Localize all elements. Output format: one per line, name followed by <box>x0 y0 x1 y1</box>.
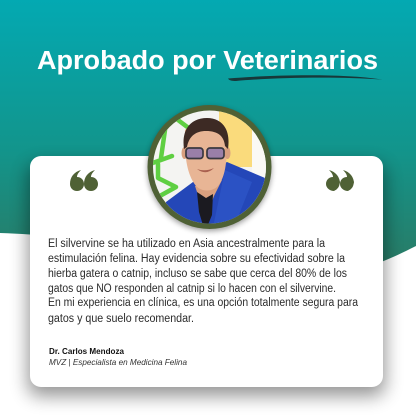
doctor portrait <box>147 105 272 232</box>
doctor credentials: MVZ | Especialista en Medicina Felina <box>49 357 187 367</box>
quote card <box>28 156 385 396</box>
quote text: El silvervine se ha utilizado en Asia ancestralmente para la <box>48 238 326 250</box>
quote text: estimulación felina. Hay evidencia sobre su efectividad sobre la <box>48 253 346 265</box>
right quotation mark <box>326 170 354 191</box>
left quotation mark <box>70 170 98 191</box>
quote text <box>48 238 359 325</box>
quote text: gatos que NO responden al catnip si lo hacen con el silvervine. <box>48 283 336 295</box>
title: Aprobado por Veterinarios <box>37 47 378 75</box>
quote text: En mi experiencia en clínica, es una opción totalmente segura para <box>48 297 359 309</box>
quote text: gatos y que suelo recomendar. <box>48 313 194 325</box>
title underline swoosh <box>228 75 382 81</box>
doctor name: Dr. Carlos Mendoza <box>49 346 124 356</box>
quote text: hierba gatera o catnip, incluso se sabe que cerca del 80% de los <box>48 268 347 280</box>
photo <box>153 110 266 224</box>
teal curved background <box>0 0 416 270</box>
